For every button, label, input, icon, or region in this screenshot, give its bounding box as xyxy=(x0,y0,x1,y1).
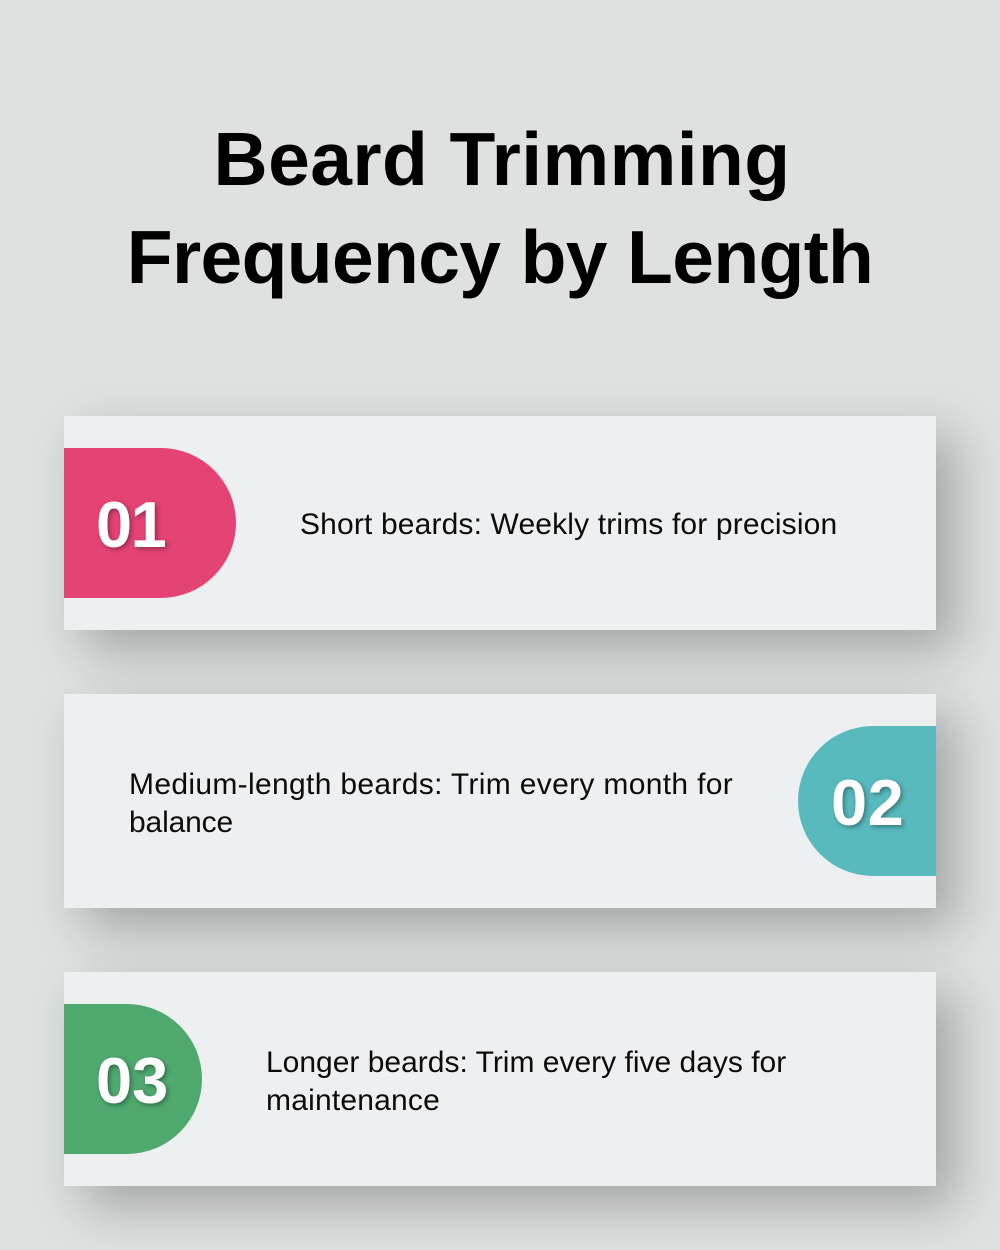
text: longer beards xyxy=(266,1046,786,1117)
title xyxy=(127,117,873,299)
badge: 01 xyxy=(64,448,236,598)
text: medium beards xyxy=(129,768,733,839)
title: Frequency by Length xyxy=(127,215,873,299)
badge: 02: 02 xyxy=(831,766,904,839)
panel: item 03 longer beards xyxy=(64,972,936,1186)
text: short beards: Short beards: Weekly trims for precision xyxy=(300,508,837,541)
panel: item 01 short beards xyxy=(64,416,936,630)
text: longer beards: maintenance xyxy=(266,1084,440,1117)
title: Beard Trimming xyxy=(214,117,790,201)
text: medium beards: Medium-length beards: Trim every month for xyxy=(129,768,733,801)
badge: 03: 03 xyxy=(96,1044,168,1117)
text: medium beards: balance xyxy=(129,806,233,839)
badge: 01: 01 xyxy=(96,488,165,561)
badge: 03 xyxy=(64,1004,202,1154)
badge: 02 xyxy=(798,726,936,876)
text: longer beards: Longer beards: Trim every five days for xyxy=(266,1046,786,1079)
panel: item 02 medium beards xyxy=(64,694,936,908)
